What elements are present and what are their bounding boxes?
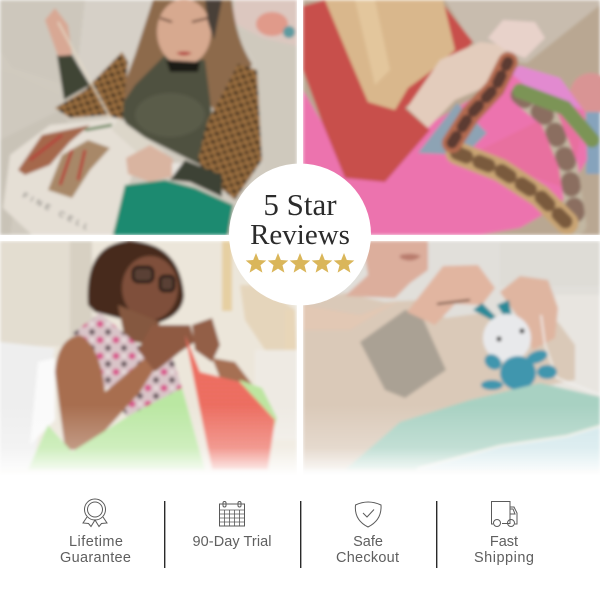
panel: amigurumi photo: [303, 241, 600, 476]
sweater: [303, 293, 575, 470]
left arm: [55, 335, 155, 450]
green pillow: [28, 388, 205, 470]
label: lifetime guarantee: Lifetime: [69, 534, 123, 550]
divider two: [300, 501, 301, 568]
label: fast shipping: Shipping: [474, 550, 534, 566]
divider three: [436, 501, 437, 568]
yarn ball: [570, 73, 600, 115]
panel: crochet strip photo: [303, 0, 600, 235]
label: fast shipping: Fast: [490, 534, 518, 550]
dress: [73, 313, 182, 418]
pampas: [222, 241, 232, 311]
feature: lifetime guarantee: [60, 499, 131, 566]
icon: calendar: [220, 502, 244, 526]
brown strip: [457, 153, 567, 223]
badge heading line one: 5 Star: [263, 187, 337, 222]
jeans right: [586, 112, 600, 174]
feature: safe checkout: [336, 502, 399, 566]
label: safe checkout: Safe: [353, 534, 383, 550]
shirt: [303, 0, 473, 182]
face: [122, 256, 178, 320]
hair: [120, 0, 252, 118]
icon: truck: [492, 502, 517, 526]
icon: medal: [83, 499, 107, 526]
top: [118, 55, 212, 165]
panel: embroidery photo: [0, 0, 297, 235]
brand text on fabric: FINE CELL: [21, 191, 93, 233]
hands: [138, 325, 195, 372]
label: safe checkout: Checkout: [336, 550, 399, 566]
fabric hand: [126, 145, 178, 182]
jeans: [418, 103, 487, 155]
embroidery: [18, 125, 90, 175]
cuff: [360, 310, 446, 398]
sleeve: [57, 55, 90, 100]
teal cushion: [113, 180, 233, 235]
label: lifetime guarantee: Guarantee: [60, 550, 131, 566]
label: safe checkout: [336, 534, 399, 566]
hands: [407, 265, 495, 325]
white pillows: [0, 342, 55, 470]
label: 90-day trial: 90-Day Trial: [192, 534, 272, 550]
bottom white fade: [0, 405, 600, 476]
fabric: [3, 118, 140, 235]
arm and hands: [407, 42, 507, 128]
feature: 90-day trial: [192, 502, 272, 550]
glasses: [133, 267, 153, 282]
bunny: [473, 300, 557, 390]
hair: [325, 0, 455, 110]
raised hand: [45, 8, 72, 56]
badge heading line two: Reviews: [250, 219, 350, 251]
cuff: [172, 163, 184, 179]
mint pillow: [345, 383, 600, 470]
panel: knitting photo: [0, 241, 297, 476]
divider one: [164, 501, 165, 568]
face and neck: [345, 241, 428, 298]
face: [157, 0, 211, 65]
label: fast shipping: [474, 534, 534, 566]
feature: fast shipping: [474, 502, 534, 566]
knit panel: [185, 335, 275, 470]
pink pillow: [303, 66, 587, 235]
label: lifetime guarantee: [60, 534, 131, 566]
jacket right: [198, 64, 262, 200]
five gold stars: [246, 253, 354, 273]
working strip: [452, 62, 508, 143]
icon: shield: [355, 502, 381, 527]
jacket left arm: [55, 52, 128, 120]
badge: 5 star reviews: [229, 164, 371, 306]
striped strip: [452, 62, 592, 225]
hair: [88, 241, 184, 325]
dark sleeve: [170, 160, 222, 197]
